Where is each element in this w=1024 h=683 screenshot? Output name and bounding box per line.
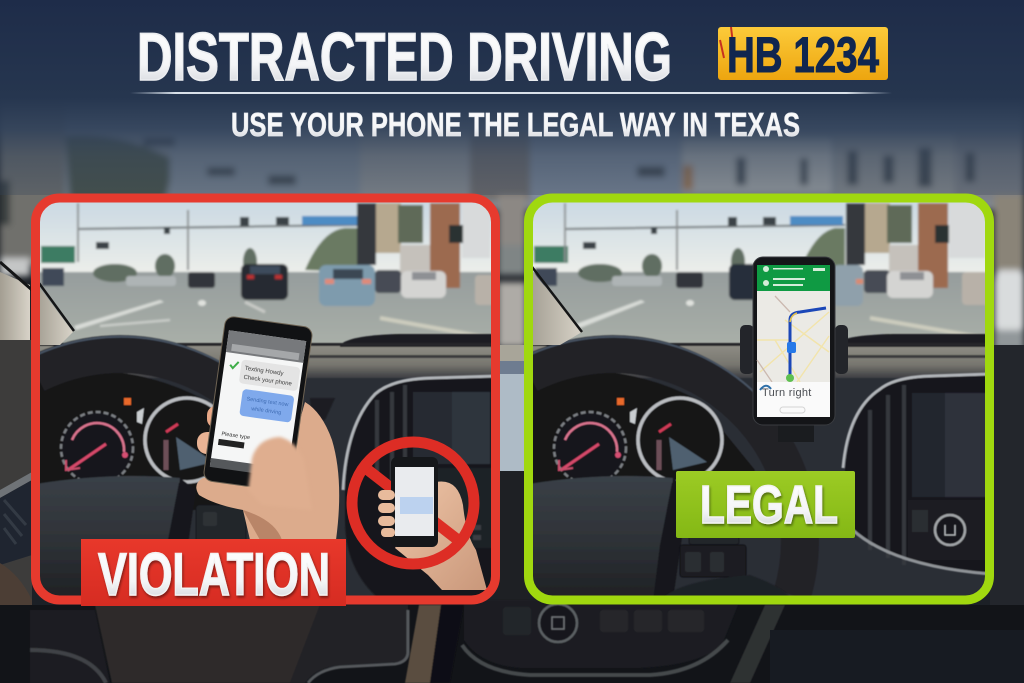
phone held in hand: texting xyxy=(203,316,313,492)
legal street view xyxy=(529,198,990,600)
panel border: red xyxy=(36,198,496,600)
mounted phone with navigation xyxy=(740,257,848,442)
label: violation: VIOLATION xyxy=(98,541,330,608)
dash and vent right xyxy=(660,374,990,600)
phone clamp xyxy=(740,325,848,442)
route instruction: Turn right xyxy=(762,387,812,399)
thumb on phone xyxy=(248,437,312,510)
input label: Please type xyxy=(221,431,250,441)
blue reply bubble: Sending text now xyxy=(246,396,289,408)
message bubble xyxy=(239,359,300,391)
centre console xyxy=(462,600,785,683)
dash and vent left xyxy=(310,376,497,600)
blue reply bubble: while driving xyxy=(250,406,282,416)
panel: violation xyxy=(36,198,497,608)
blue reply bubble xyxy=(239,389,294,423)
badge: HB 1234: HB 1234 xyxy=(727,27,879,83)
check mark xyxy=(230,361,239,369)
title divider xyxy=(130,92,892,94)
title: DISTRACTED DRIVING xyxy=(137,19,672,95)
message bubble: Check your phone xyxy=(243,375,293,388)
prohibition sign with hand and phone xyxy=(352,442,487,590)
subtitle: USE YOUR PHONE THE LEGAL WAY IN TEXAS xyxy=(231,106,800,143)
label: legal xyxy=(676,471,855,538)
lower steering wheel xyxy=(30,605,464,683)
panel border: green xyxy=(528,198,990,600)
map xyxy=(757,291,830,382)
panel: legal xyxy=(528,198,990,600)
message bubble: Texting Howdy xyxy=(244,366,284,377)
label: legal: LEGAL xyxy=(700,475,838,535)
hand holding phone xyxy=(196,402,339,540)
violation street view xyxy=(36,198,497,600)
